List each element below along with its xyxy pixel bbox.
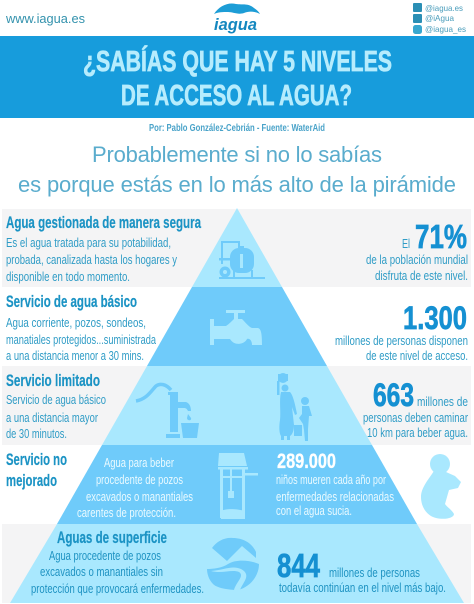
statistic: 844 — [277, 547, 446, 595]
level 3 description: Servicio de agua básico — [6, 392, 106, 407]
level 5 description: Aguas de superficie — [57, 528, 167, 547]
level 2 description: a una distancia menor a 30 mins. — [6, 348, 144, 363]
pyramid — [10, 208, 464, 603]
pyramid level 5 — [10, 524, 464, 603]
statistic: 289.000: niños mueren cada año por — [276, 472, 386, 487]
icon: crouching child — [421, 454, 461, 519]
level 5 description: excavados o manantiales sin — [40, 564, 163, 579]
level 4 heading — [6, 450, 67, 490]
statistic: 71% — [366, 218, 468, 283]
level 5 description: protección que provocará enfermedades. — [31, 581, 204, 596]
level 1 description: probada, canalizada hasta los hogares y — [6, 252, 177, 267]
level 2 description: Servicio de agua básico — [6, 292, 137, 311]
statistic: 289.000: con el agua sucia. — [276, 503, 352, 518]
statistic: 71%: El — [402, 236, 410, 251]
level 3 description — [6, 371, 106, 441]
logo: iagua — [214, 3, 260, 34]
statistic: 1.300 — [335, 300, 468, 363]
icon: treatment plant — [219, 242, 265, 279]
social media handles: @iAgua — [425, 13, 454, 23]
pyramid level 4 — [57, 445, 417, 524]
level 1 description: Es el agua tratada para su potabilidad, — [6, 235, 171, 250]
pyramid level 3 — [102, 366, 372, 445]
level 3 description: a una distancia mayor — [6, 410, 98, 425]
statistic: 844: millones de personas — [329, 565, 420, 580]
icon: hand water pump — [136, 384, 199, 438]
level 1 description: Agua gestionada de manera segura — [6, 213, 201, 232]
level 3 description: de 30 minutos. — [6, 426, 67, 441]
level 3 description: Servicio limitado — [6, 371, 100, 390]
subtitle: es porque estás en lo más alto de la pirámide — [18, 172, 456, 197]
level 1 description — [6, 213, 201, 284]
title banner — [0, 36, 474, 118]
social media handles — [413, 3, 466, 34]
pyramid level 2 — [147, 287, 327, 366]
byline: Por: Pablo González-Cebrián - Fuente: WaterAid — [149, 123, 325, 134]
title banner: DE ACCESO AL AGUA? — [121, 80, 352, 112]
social media handles: @iagua_es — [425, 24, 466, 34]
level 5 description: Agua procedente de pozos — [49, 548, 161, 563]
statistic: 289.000: 289.000 — [277, 450, 336, 473]
level 4 description: carentes de protección. — [77, 505, 176, 520]
website url: www.iagua.es — [5, 12, 85, 26]
social media handles: @iagua.es — [425, 3, 463, 13]
level 4 heading: mejorado — [6, 471, 57, 490]
subtitle — [18, 142, 456, 197]
statistic: 663: 663 — [373, 377, 414, 413]
background bands — [2, 209, 471, 603]
level 4 description — [77, 455, 193, 520]
subtitle: Probablemente si no lo sabías — [92, 142, 382, 167]
pyramid level 1 — [192, 208, 282, 287]
logo: iagua: iagua — [214, 15, 257, 34]
level 4 description: procedente de pozos — [96, 472, 183, 487]
icon: tap — [210, 310, 262, 345]
level 2 description — [6, 292, 157, 363]
icon: woman and child carrying water — [277, 373, 312, 441]
level 2 description: Agua corriente, pozos, sondeos, — [6, 315, 146, 330]
statistic: 663 — [363, 377, 468, 440]
icon: well — [218, 453, 258, 519]
statistic: 289.000 — [276, 450, 394, 518]
level 4 heading: Servicio no — [6, 450, 67, 469]
statistic: 289.000: enfermedades relacionadas — [276, 489, 394, 504]
level 1 description: disponible en todo momento. — [6, 269, 130, 284]
level 4 description: Agua para beber — [104, 455, 174, 470]
level 5 description — [31, 528, 204, 596]
icon: water landscape — [207, 538, 259, 590]
statistic: 844: 844 — [277, 547, 321, 584]
level 4 description: excavados o manantiales — [86, 489, 193, 504]
level 2 description: manatiales protegidos...suministrada — [6, 332, 157, 347]
